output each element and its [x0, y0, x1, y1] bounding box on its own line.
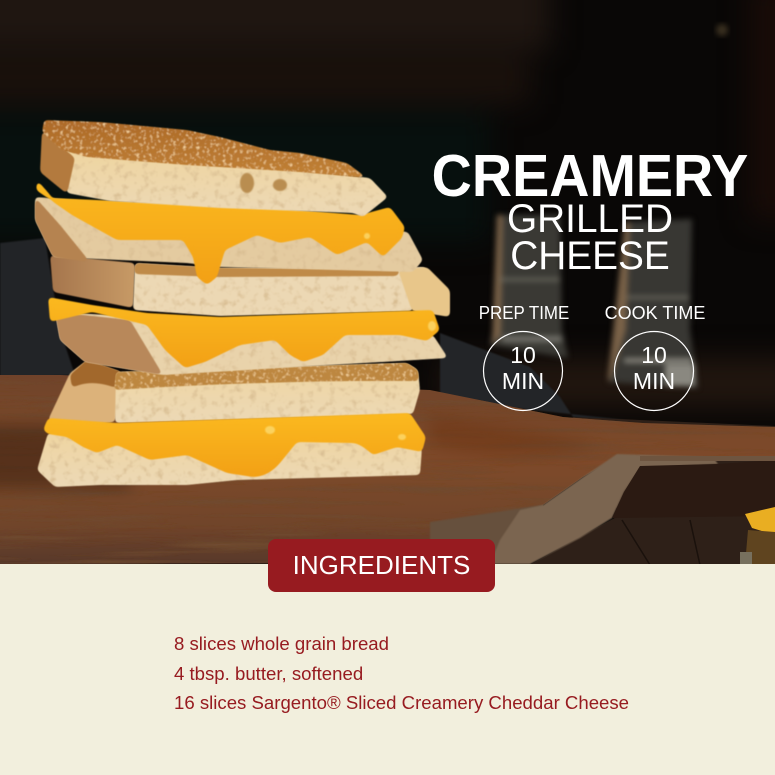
ingredients list: 4 tbsp. butter, softened	[174, 662, 363, 684]
cook time value: 10	[641, 342, 667, 368]
lower bread	[37, 430, 422, 487]
prep time value: 10	[510, 342, 536, 368]
ingredients heading	[268, 539, 495, 592]
upper bread left lobe	[48, 360, 122, 428]
upper bread front	[133, 263, 427, 316]
toasted top	[42, 120, 388, 197]
cook time value: MIN	[633, 368, 675, 394]
subtitle	[507, 197, 673, 278]
bread holes	[240, 173, 287, 193]
board handle lip	[490, 454, 718, 564]
pepper shakers	[490, 215, 698, 388]
ingredients heading: INGREDIENTS	[293, 550, 470, 580]
cream footer	[0, 564, 775, 775]
title: CREAMERY	[432, 143, 748, 209]
cheese highlights	[265, 233, 436, 440]
subtitle: CHEESE	[510, 234, 670, 278]
upper bread end	[398, 267, 450, 317]
upper bread side	[50, 255, 135, 308]
sandwich middle	[48, 255, 450, 375]
ingredients list: 8 slices whole grain bread	[174, 633, 389, 654]
front edge of board	[430, 505, 543, 564]
lower bread	[35, 197, 423, 272]
cheese	[48, 297, 440, 368]
cloth	[0, 238, 663, 424]
sandwich bottom half	[37, 360, 426, 487]
prep time value: MIN	[502, 368, 544, 394]
prep time circle	[484, 332, 562, 410]
cutting board	[0, 375, 775, 564]
handle shadow	[612, 460, 775, 518]
ingredients list: 16 slices Sargento® Sliced Creamery Cheddar Cheese	[174, 692, 629, 713]
background	[0, 0, 775, 565]
lower bread	[55, 312, 448, 375]
ingredients list	[174, 633, 629, 713]
small cheese dish	[740, 507, 775, 565]
upper bread front	[115, 363, 420, 423]
left crust side	[40, 130, 75, 194]
cheese	[43, 413, 426, 477]
subtitle: GRILLED	[507, 197, 673, 241]
prep time label: PREP TIME	[479, 303, 569, 323]
prep time value	[502, 342, 544, 394]
cook time value	[633, 342, 675, 394]
table	[530, 417, 775, 565]
upper bread crumb	[60, 150, 388, 217]
cheese	[36, 180, 405, 285]
cook time label: COOK TIME	[605, 303, 705, 323]
cook time circle	[614, 332, 694, 410]
sandwich top half	[35, 120, 423, 285]
